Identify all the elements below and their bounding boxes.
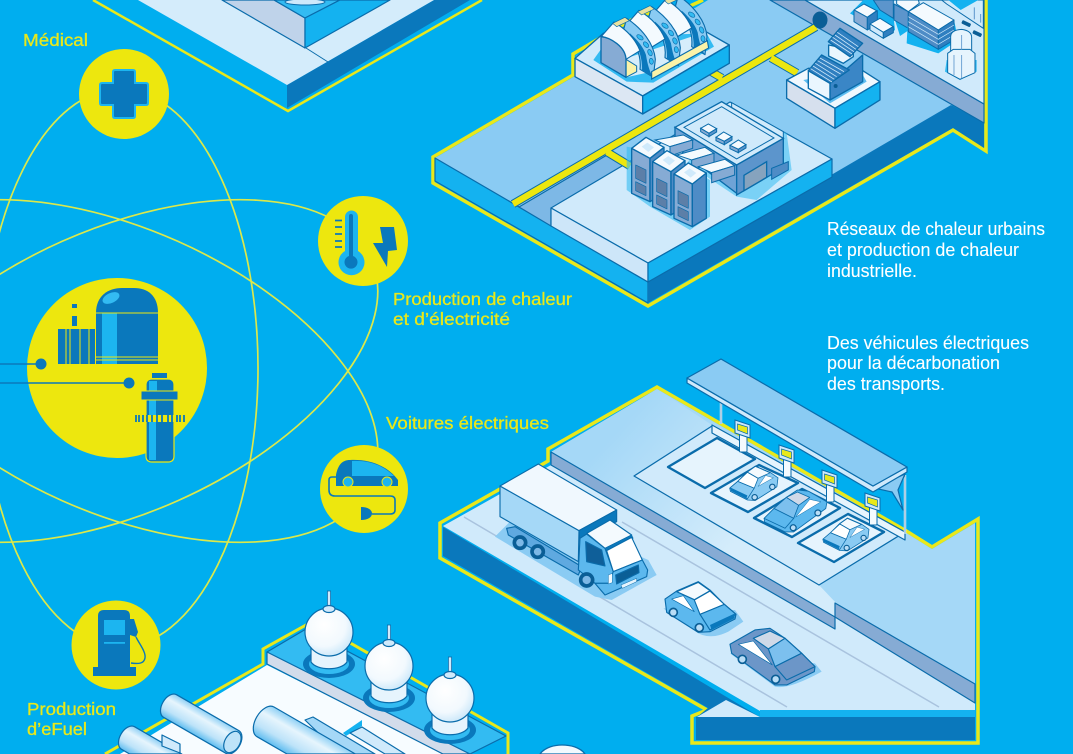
platform top surface [435,0,953,282]
text block: district heating: et production de chaleur [827,240,1019,260]
building: curved hall [593,0,714,83]
panel: heat networks platform [433,0,986,306]
label: heat and electricity production: Production de chaleur [393,289,572,309]
icon: eFuel pump circle [72,600,160,690]
building: house on pedestal [787,28,880,128]
charging canopy [687,359,907,540]
pedestal of curved hall [575,20,729,114]
pipe outlet [812,12,828,28]
white plate [120,665,443,754]
charging plaza [634,426,905,585]
platform outline [433,0,986,306]
icon: electric car circle [320,445,408,533]
label: Médical: Médical [23,30,88,50]
city platform top [805,0,984,104]
text block: electric vehicles: des transports. [827,374,945,394]
text block: district heating [827,219,1045,281]
panel: eFuel plant platform [105,591,585,754]
label: heat and electricity production [393,289,572,329]
front strip [760,710,975,717]
partial dome [540,745,585,754]
road surface [443,465,975,711]
retaining wall [551,452,835,629]
building: warehouse with cooling towers [627,102,792,230]
upper plate [551,389,975,684]
tanks [118,694,405,754]
connector lines [0,359,134,388]
text block: electric vehicles [827,333,1029,394]
reactor vessel [133,373,187,462]
city platform wall [770,0,984,123]
parked cars [730,466,869,551]
yellow heat pipes [513,27,816,204]
platform outline [105,625,508,754]
panel: transport platform [440,359,978,743]
atom orbits [0,89,429,647]
text block: electric vehicles: pour la décarbonation [827,353,1000,373]
label: heat and electricity production: et d’électricité [393,309,510,329]
lane lines [464,517,939,707]
dark side wall [648,105,984,303]
city buildings [850,0,983,80]
lower plate [551,102,832,282]
dark side [443,527,975,740]
cooling towers [627,137,710,230]
label: eFuel production [27,699,116,739]
label: eFuel production: d’eFuel [27,719,87,739]
reactor building [96,288,158,364]
turbine hall and chimney [58,304,95,364]
plate strip next to wall [551,389,837,617]
spheres [303,591,476,744]
label: eFuel production: Production [27,699,116,719]
platform outline [440,387,978,743]
icon: central nuclear circle [0,278,207,462]
text block: district heating: Réseaux de chaleur urbains [827,219,1045,239]
icon: heat and electricity circle [318,196,408,286]
front left wall [435,158,648,303]
icon: medical circle [79,49,169,139]
raised plate [267,629,506,754]
label: electric cars: Voitures électriques [386,413,549,433]
lower strip [519,155,628,226]
text block: electric vehicles: Des véhicules électriques [827,333,1029,353]
chargers [735,420,880,525]
panel: top-left platform corner [93,0,482,111]
text block: district heating: industrielle. [827,261,917,281]
road cars [663,582,822,687]
truck [495,464,657,600]
